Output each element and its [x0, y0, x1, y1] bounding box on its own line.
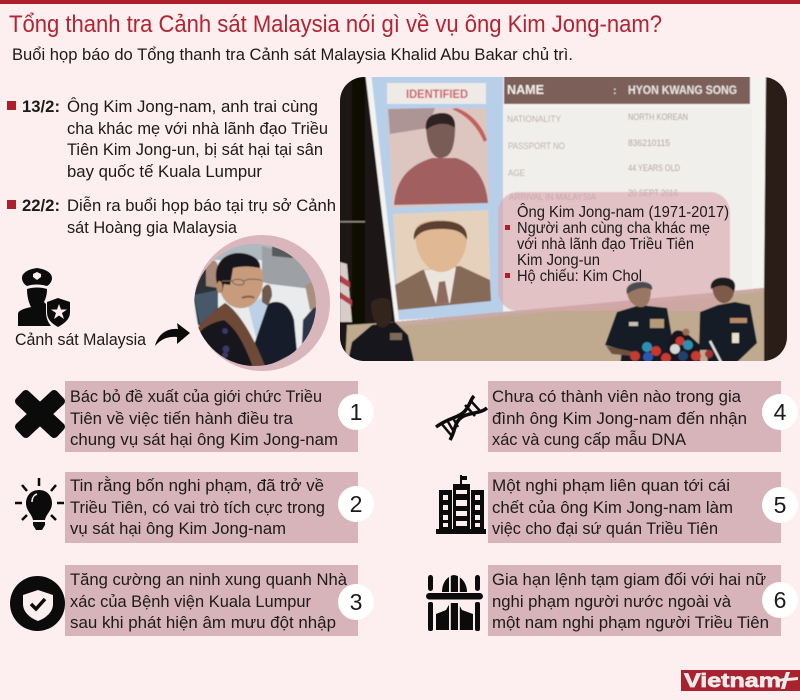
item 6: 6: [774, 587, 786, 613]
item 3: [10, 565, 374, 636]
wall under screen: [344, 292, 765, 361]
item 4: xác và cung cấp mẫu DNA: [492, 430, 686, 449]
subtitle: Buổi họp báo do Tổng thanh tra Cảnh sát Malaysia Khalid Abu Bakar chủ trì.: [12, 45, 573, 64]
item 5: Một nghi phạm liên quan tới cái: [492, 477, 730, 495]
projection screen: [365, 72, 766, 322]
item 6: một nam nghi phạm người Triều Tiên: [492, 614, 769, 632]
data rows: NORTH KOREAN: [628, 112, 688, 122]
logo: Vietnam+: Vietnam: [684, 671, 781, 692]
press conference photo: HYON KWANG SONG: [628, 85, 737, 97]
press conference photo: :: [613, 85, 617, 97]
title: Tổng thanh tra Cảnh sát Malaysia nói gì về vụ ông Kim Jong-nam?: [9, 11, 662, 38]
item 3: 3: [350, 589, 362, 615]
identified label: [387, 83, 486, 104]
data rows: PASSPORT NO: [508, 141, 565, 151]
icon: cross: [13, 388, 67, 440]
item 2: vụ sát hại ông Kim Jong-nam: [70, 520, 286, 538]
officer left: [347, 298, 415, 366]
data rows: 20 SEPT 2016: [628, 188, 678, 198]
portrait circle: [190, 235, 330, 372]
arrow: [155, 323, 190, 346]
press conference photo: [335, 72, 792, 366]
timeline entry 22/2: [7, 196, 336, 237]
timeline entry 13/2: bay quốc tế Kuala Lumpur: [67, 162, 262, 181]
overlay text: Kim Jong-nam facts: Kim Jong-un: [517, 252, 600, 269]
icon: prison bars: [426, 575, 483, 631]
item 1: 1: [350, 399, 362, 425]
icon: police officer with shield: [18, 268, 70, 327]
officer centre: [605, 282, 672, 366]
data rows: AGE: [508, 168, 525, 178]
logo: Vietnam+: [681, 670, 800, 692]
icon: embassy building: [436, 475, 486, 534]
icon: shield in circle: [10, 576, 65, 631]
name bar: [503, 77, 750, 104]
item 3: sau khi phát hiện âm mưu đột nhập: [70, 614, 336, 632]
data rows: NATIONALITY: [507, 114, 561, 124]
item 6: nghi phạm người nước ngoài và: [492, 593, 732, 611]
timeline entry 13/2: Tiên Kim Jong-un, bị sát hại tại sân: [67, 140, 323, 159]
icon: light bulb: [15, 478, 64, 530]
overlay text: Kim Jong-nam facts: với nhà lãnh đạo Triều Tiên: [517, 236, 694, 253]
overlay text: Kim Jong-nam facts: Ông Kim Jong-nam (1971-2017): [517, 204, 729, 221]
data rows: 44 YEARS OLD: [628, 163, 680, 173]
suspect photo 1: [388, 108, 489, 208]
data rows: ARRIVAL IN MALAYSIA: [509, 192, 596, 202]
item 4: đình ông Kim Jong-nam đến nhận: [492, 410, 747, 428]
officer right: [699, 277, 757, 366]
item 4: [436, 381, 798, 452]
data rows: [507, 112, 688, 202]
item 4: 4: [774, 399, 787, 425]
microphones: [629, 328, 723, 361]
item 3: xác của Bệnh viện Kuala Lumpur: [70, 593, 311, 611]
timeline entry 22/2: Diễn ra buổi họp báo tại trụ sở Cảnh: [67, 196, 336, 215]
timeline entry 22/2: 22/2:: [22, 196, 60, 215]
item 6: [426, 565, 798, 636]
icon: DNA helix: [436, 396, 487, 440]
item 2: [15, 472, 374, 543]
press conference photo: NAME: [507, 83, 544, 97]
data rows: 836210115: [628, 138, 670, 148]
item 1: chung vụ sát hại ông Kim Jong-nam: [70, 431, 338, 449]
press conference photo: IDENTIFIED: [406, 89, 468, 101]
item 2: Triều Tiên, có vai trò tích cực trong: [70, 499, 325, 517]
timeline entry 13/2: cha khác mẹ với nhà lãnh đạo Triều: [67, 119, 328, 138]
item 2: Tin rằng bốn nghi phạm, đã trở về: [70, 476, 324, 495]
timeline entry 13/2: Ông Kim Jong-nam, anh trai cùng: [67, 97, 318, 116]
overlay text: Kim Jong-nam facts: Người anh cùng cha khác mẹ: [517, 220, 710, 237]
suspect photo 2: [393, 210, 491, 310]
item 5: [436, 472, 798, 543]
item 5: việc cho đại sứ quán Triều Tiên: [492, 520, 718, 538]
timeline entry 13/2: [7, 97, 328, 181]
label: Cảnh sát Malaysia: Cảnh sát Malaysia: [15, 331, 147, 349]
overlay box: [498, 192, 730, 311]
item 1: [13, 381, 374, 452]
item 6: Gia hạn lệnh tạm giam đối với hai nữ: [492, 571, 766, 589]
item 2: 2: [350, 491, 362, 517]
item 4: Chưa có thành viên nào trong gia: [492, 388, 742, 406]
item 1: Bác bỏ đề xuất của giới chức Triều: [70, 388, 322, 406]
item 3: Tăng cường an ninh xung quanh Nhà: [70, 571, 348, 589]
overlay text: Kim Jong-nam facts: Hộ chiếu: Kim Chol: [517, 268, 642, 285]
timeline entry 13/2: 13/2:: [22, 97, 60, 116]
overlay text: Kim Jong-nam facts: [505, 204, 729, 285]
item 5: chết của ông Kim Jong-nam làm: [492, 499, 733, 517]
timeline entry 22/2: sát Hoàng gia Malaysia: [67, 218, 238, 237]
item 1: Tiên về việc tiến hành điều tra: [70, 410, 294, 428]
item 5: 5: [774, 492, 786, 518]
